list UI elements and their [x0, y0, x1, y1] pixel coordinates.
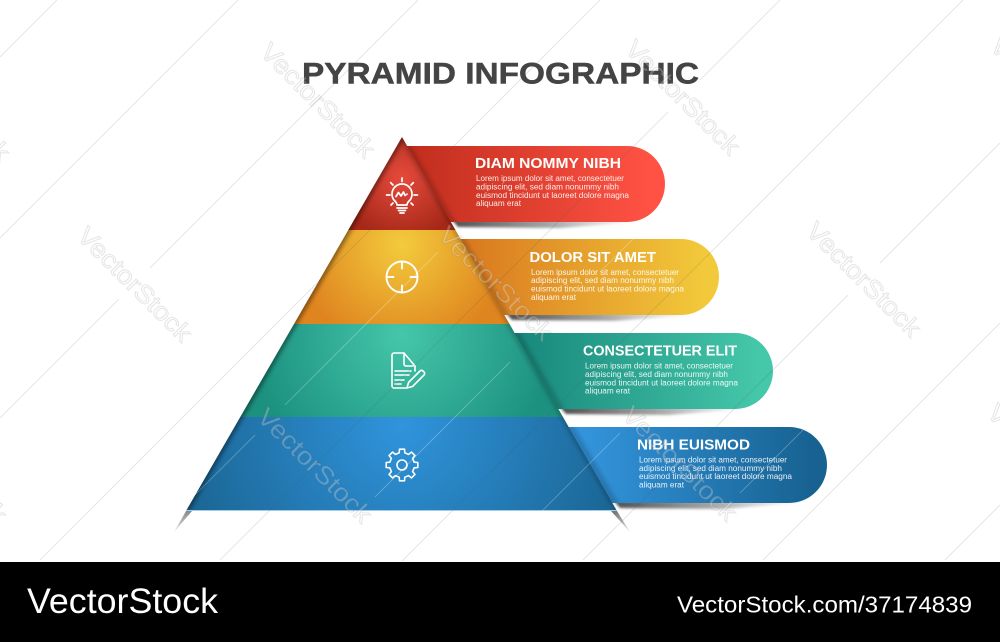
text: nibh euismod: Lorem ipsum dolor sit amet, consectetuer [639, 456, 787, 464]
text: consectetuer elit: euismod tincidunt ut laoreet dolore magna [585, 378, 739, 388]
spike: bottom left [174, 511, 192, 532]
text: dolor sit amet: euismod tincidunt ut laoreet dolore magna [531, 284, 685, 294]
pill: nibh euismod [540, 427, 827, 503]
text: nibh euismod: aliquam erat [639, 480, 685, 490]
pyramid layer: teal [240, 324, 563, 417]
title: PYRAMID INFOGRAPHIC [302, 58, 699, 90]
text: dolor sit amet: adipiscing elit, sed diam nonummy nibh [531, 276, 674, 285]
watermarks: VectorStock [619, 35, 746, 161]
text: nibh euismod: euismod tincidunt ut laoreet dolore magna [639, 472, 793, 481]
text: consectetuer elit: CONSECTETUER ELIT [583, 344, 737, 360]
text: consectetuer elit: aliquam erat [585, 386, 631, 396]
icon: target [386, 262, 418, 292]
text: nibh euismod [637, 437, 793, 490]
watermarks: VectorStock [800, 217, 927, 343]
pill: consectetuer elit [490, 333, 773, 409]
text: nibh euismod: NIBH EUISMOD [637, 437, 750, 453]
watermarks: VectorStock [251, 403, 378, 529]
icon: document with pencil [392, 353, 425, 388]
icon: gear [386, 449, 418, 481]
pill: diam nommy nibh [402, 146, 665, 222]
footer image id: VectorStock.com/37174839 [677, 592, 972, 618]
text: dolor sit amet: DOLOR SIT AMET [530, 250, 656, 266]
watermarks: VectorStock [71, 222, 198, 348]
text: consectetuer elit: adipiscing elit, sed diam nonummy nibh [585, 370, 728, 379]
watermarks: VectorStock [254, 38, 381, 164]
text: diam nommy nibh [475, 156, 630, 208]
spike: bottom right [611, 511, 630, 532]
text: consectetuer elit: Lorem ipsum dolor sit amet, consectetuer [585, 362, 733, 371]
pyramid layer: blue [180, 417, 620, 511]
pyramid layer: red [348, 137, 456, 230]
text: nibh euismod: adipiscing elit, sed diam nonummy nibh [639, 464, 782, 473]
text: diam nommy nibh: euismod tincidunt ut laoreet dolore magna [476, 191, 630, 200]
text: diam nommy nibh: Lorem ipsum dolor sit amet, consectetuer [476, 174, 624, 183]
footer logo text: VectorStock [27, 582, 219, 621]
text: consectetuer elit [583, 344, 739, 396]
text: diam nommy nibh: adipiscing elit, sed diam nonummy nibh [476, 182, 619, 192]
pill shadows [452, 220, 802, 509]
text: dolor sit amet: aliquam erat [531, 293, 577, 302]
footer bar [0, 562, 1000, 642]
text: dolor sit amet: Lorem ipsum dolor sit amet, consectetuer [531, 268, 679, 277]
watermarks [0, 32, 1000, 529]
text: dolor sit amet [530, 250, 685, 302]
pyramid [180, 137, 620, 511]
pyramid layer: yellow [294, 230, 510, 324]
pill: dolor sit amet [430, 239, 719, 315]
watermarks: VectorStock [432, 221, 559, 347]
text: diam nommy nibh: aliquam erat [476, 199, 522, 208]
icon: light bulb [386, 178, 418, 213]
watermarks: VectorStock [616, 401, 743, 527]
text: diam nommy nibh: DIAM NOMMY NIBH [475, 156, 621, 172]
